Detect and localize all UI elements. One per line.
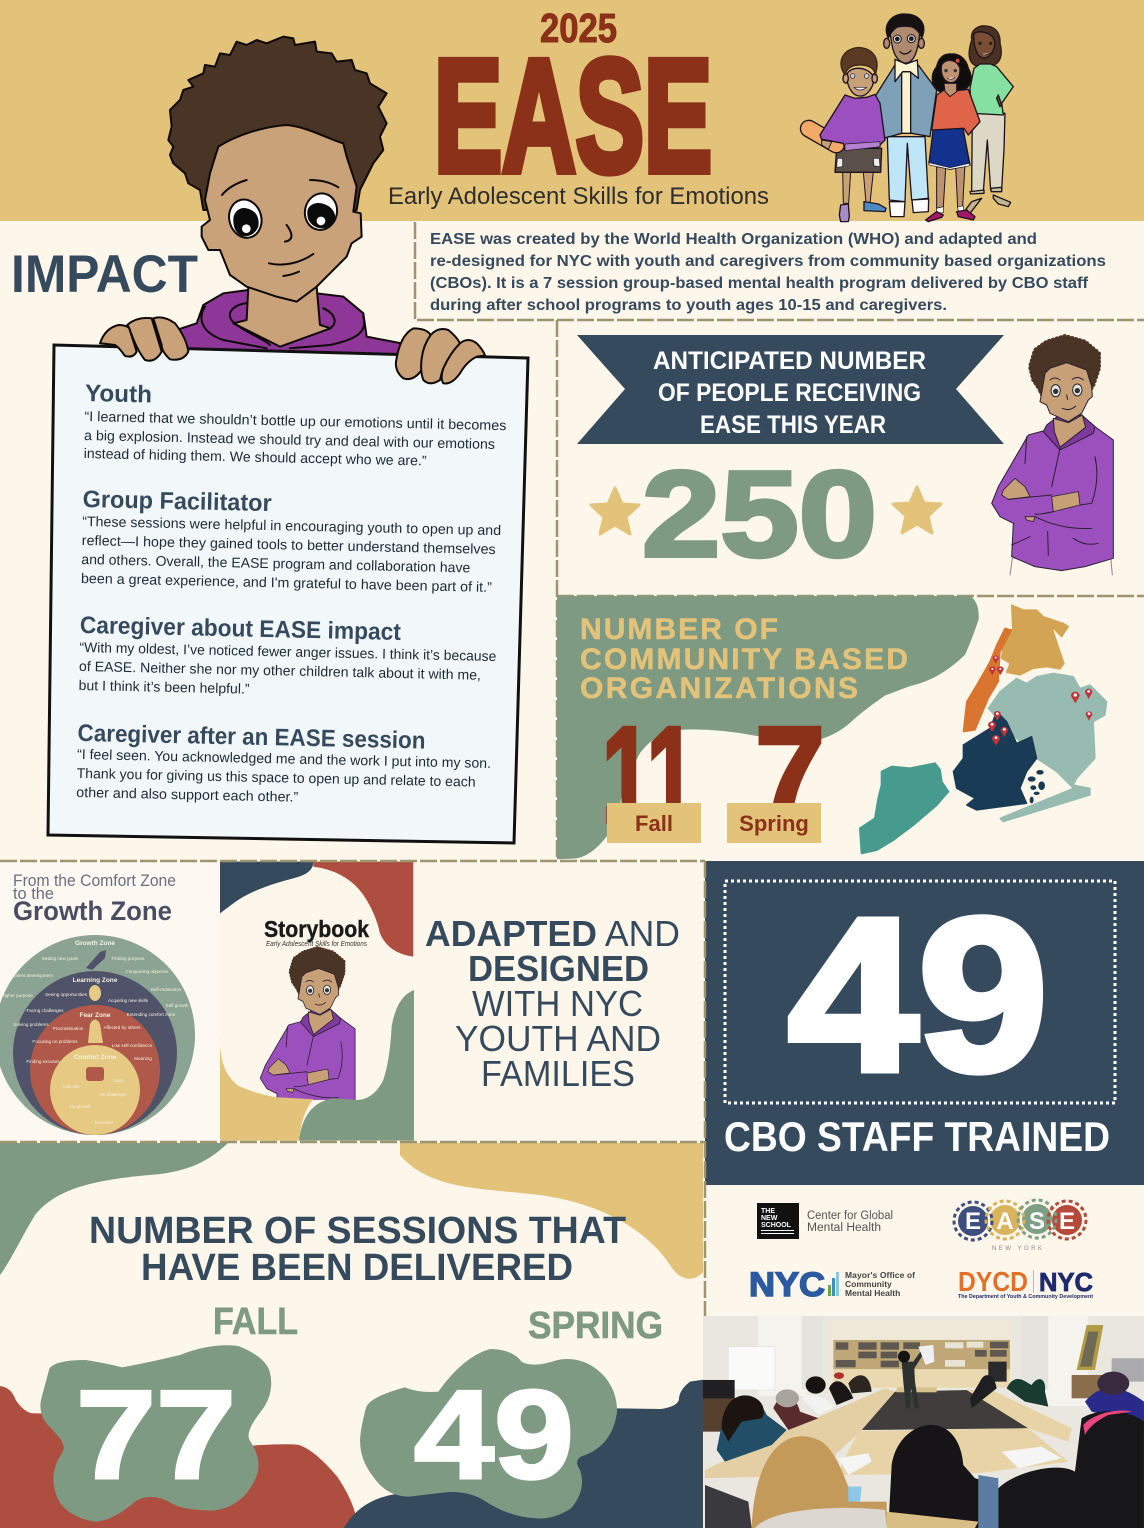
logo: EASE New York: E xyxy=(965,1208,981,1235)
concentric zone diagram: Seeing opportunities xyxy=(45,992,88,997)
face xyxy=(202,125,362,302)
icon: left star xyxy=(591,488,639,534)
logo: DYCD NYC: The Department of Youth & Community Development xyxy=(958,1294,1093,1300)
panel: number of community based organizations xyxy=(557,596,1107,859)
banner text: ANTICIPATED NUMBER xyxy=(653,347,926,375)
logo: EASE New York xyxy=(954,1200,1086,1252)
illustration: boy with crossed arms xyxy=(992,336,1113,575)
subtitle: Early Adolescent Skills for Emotions xyxy=(388,183,769,210)
panel: anticipated number xyxy=(577,335,1113,582)
logo: The New School: Center for Global xyxy=(807,1210,893,1222)
number 250: 250 xyxy=(642,446,877,582)
banner xyxy=(577,335,1004,444)
panel: comfort zone to growth zone xyxy=(0,862,220,1141)
panel: storybook xyxy=(220,862,414,1141)
intro text xyxy=(430,231,1106,314)
logo: NYC Mayor's Office of Community Mental Health: NYC xyxy=(749,1266,825,1304)
concentric zone diagram: Affected by others xyxy=(104,1025,141,1030)
fall label xyxy=(607,803,701,843)
panel: comfort zone to growth zone: Growth Zone xyxy=(13,896,172,926)
logo: EASE New York: A xyxy=(996,1208,1014,1235)
banner text xyxy=(653,347,926,439)
heading: HAVE BEEN DELIVERED xyxy=(141,1247,573,1289)
blob sage top-left xyxy=(0,1143,228,1275)
man xyxy=(875,14,937,217)
panel: CBO staff trained xyxy=(705,861,1144,1185)
concentric zone diagram: Finding purpose xyxy=(112,956,145,961)
logo: NYC Mayor's Office of Community Mental Health xyxy=(749,1266,915,1304)
quote: caregiver after an EASE session: “I feel seen. You acknowledged me and the work I put into my son. xyxy=(77,746,491,771)
sage blob xyxy=(557,596,979,859)
quote: youth: instead of hiding them. We should accept who we are.” xyxy=(84,445,427,468)
fall count: 77 xyxy=(76,1364,236,1505)
spring label: Spring xyxy=(739,811,809,836)
logo: NYC Mayor's Office of Community Mental Health: Community xyxy=(845,1279,892,1289)
concentric zone diagram: No challenge xyxy=(100,1092,127,1097)
concentric zone diagram: Setting new goals xyxy=(42,956,79,961)
quote: group facilitator xyxy=(81,486,502,595)
text: adapted and designed: FAMILIES xyxy=(481,1053,635,1094)
concentric zone diagram: Extending comfort zone xyxy=(127,1012,176,1017)
quote: youth: Youth xyxy=(85,380,152,408)
quote: group facilitator: and others. Overall, the EASE program and collaboration have xyxy=(81,551,471,575)
decorative blobs xyxy=(220,862,414,1141)
intro text: (CBOs). It is a 7 session group-based mental health program delivered by CBO staff xyxy=(430,275,1089,292)
illustration: family group xyxy=(797,14,1013,222)
concentric zone diagram: Talent development xyxy=(13,973,54,978)
intro text: EASE was created by the World Health Organization (WHO) and adapted and xyxy=(430,231,1037,248)
panel: sessions delivered xyxy=(0,1143,705,1528)
quote: group facilitator: Group Facilitator xyxy=(82,486,272,517)
text: adapted and designed: DESIGNED xyxy=(468,948,649,989)
fall label: FALL xyxy=(213,1301,298,1343)
quote: caregiver about EASE impact: of EASE. Neither she nor my other children talk about it with me, xyxy=(79,658,481,683)
concentric zone diagram: Higher purpose xyxy=(1,993,33,998)
concentric zone diagram: Moaning xyxy=(134,1056,152,1061)
logo: EASE New York: NEW YORK xyxy=(992,1246,1042,1252)
heading xyxy=(89,1210,626,1289)
title: EASE: EASE xyxy=(434,26,712,205)
spring label: SPRING xyxy=(528,1305,663,1347)
quote: group facilitator: “These sessions were helpful in encouraging youth to open up and xyxy=(82,513,501,538)
text: adapted and designed: WITH NYC xyxy=(472,983,643,1024)
woman xyxy=(966,26,1013,213)
concentric zone diagram: Conquering objective xyxy=(125,969,169,974)
concentric zone diagram: Boredom xyxy=(95,1120,113,1125)
icon: left hand xyxy=(100,317,188,361)
logo: The New School: NEW xyxy=(761,1215,778,1222)
panel: impact sign xyxy=(48,345,528,843)
heading: From the Comfort Zone xyxy=(13,871,176,890)
concentric zone diagram: Low risk xyxy=(63,1084,80,1089)
text: adapted and designed: YOUTH AND xyxy=(455,1018,661,1059)
quote: caregiver about EASE impact: “With my oldest, I’ve noticed fewer anger issues. I think it’s because xyxy=(79,639,497,664)
concentric zone diagram: Focusing on problems xyxy=(32,1039,78,1044)
logo: DYCD NYC: DYCD xyxy=(958,1266,1028,1297)
illustration: storybook boy xyxy=(260,946,356,1100)
concentric zone diagram: Self growth xyxy=(166,1003,189,1008)
concentric zone diagram: Easy xyxy=(114,1078,125,1083)
concentric zone diagram: Finding excuses xyxy=(26,1059,60,1064)
storybook title: Early Adolescent Skills for Emotions xyxy=(266,941,367,948)
presenter xyxy=(902,1350,924,1408)
hood folds xyxy=(201,303,364,348)
quote: youth: a big explosion. Instead we should try and deal with our emotions xyxy=(84,427,495,452)
concentric zone diagram: Self-motivation xyxy=(151,987,182,992)
logo: The New School: THE xyxy=(761,1208,775,1215)
icon: right hand xyxy=(396,328,485,384)
hoodie xyxy=(157,290,410,363)
fall count: 11 xyxy=(602,699,696,852)
quotes on sign xyxy=(76,380,507,809)
logo: DYCD NYC: NYC xyxy=(1039,1267,1093,1297)
concentric zone diagram: No growth xyxy=(70,1104,91,1109)
logo: The New School xyxy=(757,1203,893,1239)
text: adapted and designed xyxy=(425,913,680,1094)
photo: classroom workshop xyxy=(703,1316,1144,1528)
quote: group facilitator: been a great experience, and I'm grateful to have been part of it.” xyxy=(81,570,492,595)
concentric zone diagram: Fear Zone xyxy=(79,1012,111,1019)
storybook title: Storybook xyxy=(264,916,369,942)
blob gold top-right xyxy=(400,1143,703,1279)
map of NYC boroughs xyxy=(860,605,1107,853)
spring label xyxy=(727,803,821,843)
banner text: EASE THIS YEAR xyxy=(700,411,886,439)
number 49: 49 xyxy=(788,874,1048,1117)
blobs behind the session counts xyxy=(0,1345,705,1528)
quote: caregiver after an EASE session: Caregiver after an EASE session xyxy=(77,720,426,755)
spring count: 7 xyxy=(755,699,825,852)
icon: right star xyxy=(893,487,941,533)
logos xyxy=(749,1200,1093,1304)
concentric zone diagram: Low self-confidence xyxy=(112,1043,153,1048)
heading xyxy=(580,613,908,705)
logo: The New School: SCHOOL xyxy=(761,1222,792,1229)
quote: caregiver about EASE impact: Caregiver about EASE impact xyxy=(80,612,401,646)
concentric zone diagram: Solving problems xyxy=(13,1022,49,1027)
logo: EASE New York: E xyxy=(1059,1208,1075,1235)
concentric zone diagram xyxy=(0,935,195,1135)
quote: youth xyxy=(84,380,507,470)
concentric zone diagram: Facing challenges xyxy=(26,1008,64,1013)
eyes xyxy=(225,196,266,241)
heading: ORGANIZATIONS xyxy=(580,672,858,705)
heading: COMMUNITY BASED xyxy=(580,643,908,676)
boy with skateboard xyxy=(797,48,886,222)
quote: caregiver after an EASE session: other and also support each other.” xyxy=(76,784,299,805)
header band xyxy=(0,0,1144,221)
concentric zone diagram: Procrastination xyxy=(53,1026,84,1031)
hair xyxy=(168,37,387,210)
quote: caregiver about EASE impact xyxy=(78,612,497,702)
nose, brows and smile xyxy=(222,180,338,276)
intro text: re-designed for NYC with youth and caregivers from community based organizations xyxy=(430,253,1106,270)
heading: NUMBER OF xyxy=(580,613,778,646)
concentric zone diagram: Acquiring new skills xyxy=(108,998,149,1003)
text: adapted and designed: ADAPTED AND xyxy=(425,913,680,954)
quote: caregiver after an EASE session: Thank you for giving us this space to open up and relate to each xyxy=(77,765,476,790)
panel: comfort zone to growth zone: to the xyxy=(13,884,54,903)
logo: DYCD NYC xyxy=(958,1266,1093,1300)
logo: NYC Mayor's Office of Community Mental Health: Mayor's Office of xyxy=(845,1270,915,1280)
logo: The New School: Mental Health xyxy=(807,1222,881,1234)
spring count: 49 xyxy=(414,1364,574,1505)
intro text: during after school programs to youth ages 10-15 and caregivers. xyxy=(430,297,947,314)
concentric zone diagram: Comfort Zone xyxy=(74,1054,117,1061)
quote: caregiver about EASE impact: but I think it’s been helpful.” xyxy=(78,677,250,697)
concentric zone diagram: Learning Zone xyxy=(73,977,118,984)
banner text: OF PEOPLE RECEIVING xyxy=(658,379,921,407)
logo: NYC Mayor's Office of Community Mental Health: Mental Health xyxy=(845,1288,900,1298)
quote: caregiver after an EASE session xyxy=(76,720,492,809)
heading: NUMBER OF SESSIONS THAT xyxy=(89,1210,626,1252)
neck xyxy=(233,287,331,347)
concentric zone diagram: Growth Zone xyxy=(75,940,115,947)
logo: EASE New York: S xyxy=(1029,1208,1045,1235)
illustration: large boy holding the sign xyxy=(157,37,410,363)
fall label: Fall xyxy=(635,811,673,836)
quote: group facilitator: reflect—I hope they gained tools to better understand themselves xyxy=(82,532,496,557)
year heading: 2025 xyxy=(540,5,617,51)
quote: youth: “I learned that we shouldn’t bottle up our emotions until it becomes xyxy=(84,408,507,433)
heading: IMPACT: IMPACT xyxy=(11,245,198,304)
girl xyxy=(926,54,980,222)
